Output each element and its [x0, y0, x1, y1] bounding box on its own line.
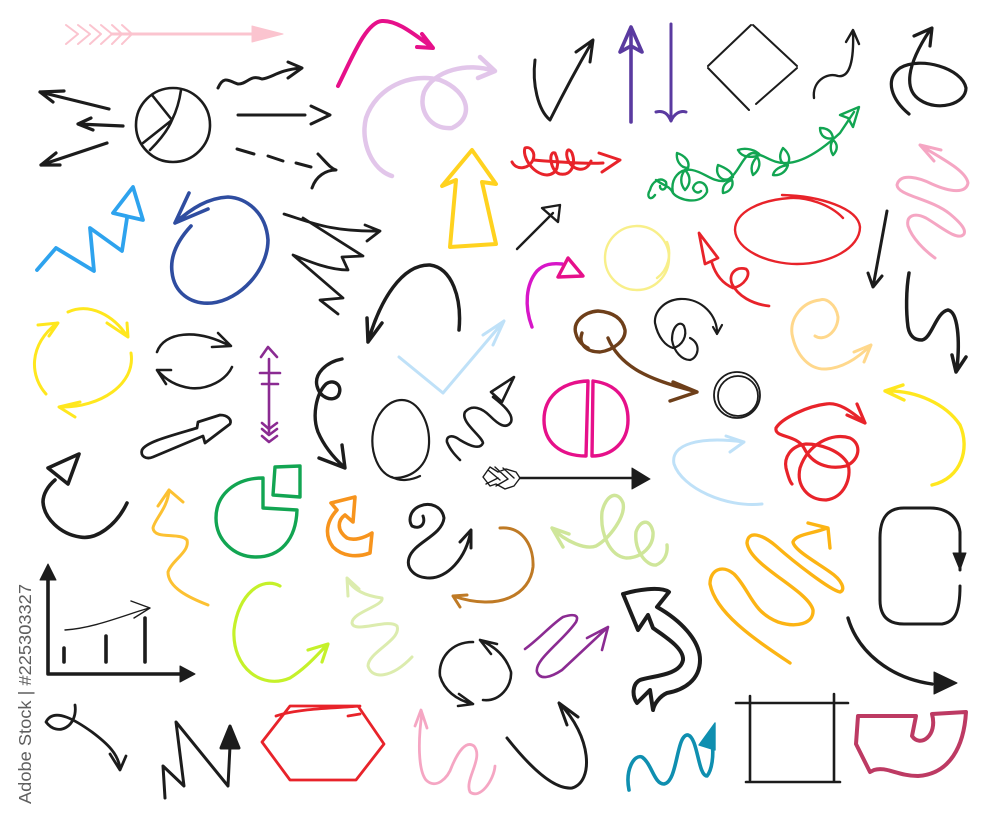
arrow: yellow up	[442, 150, 496, 247]
ellipse: red scribble	[735, 195, 860, 264]
arrow: purple down	[656, 24, 686, 121]
arrow: black small loop	[46, 705, 126, 770]
arrow: black curl	[315, 359, 345, 468]
arrow: orange coil	[710, 523, 843, 663]
arrows: left fan	[40, 91, 123, 165]
arrow: pale green loops	[552, 495, 667, 565]
arrow: red loops	[512, 148, 620, 175]
arrow: teal wave	[628, 735, 713, 790]
arrow: straight right	[238, 106, 330, 124]
cycle: small black arrows	[440, 640, 511, 706]
arrow: loop top right	[891, 28, 966, 114]
cycle: two black arrows	[157, 333, 232, 388]
arrow: purple vertical	[260, 347, 280, 442]
chart: axes with bars	[40, 564, 195, 682]
arrow: crimson block	[856, 712, 966, 776]
frame: black square	[736, 694, 848, 782]
arrow: orange block curl	[327, 497, 372, 556]
arrow: magenta curve	[338, 21, 433, 86]
arrow: black S curl	[408, 504, 471, 578]
arrow: black check	[534, 40, 593, 120]
arrow: black feathered	[483, 467, 650, 489]
arrow: brown loop	[575, 311, 697, 401]
arrow: dashed right	[237, 149, 336, 188]
arrow: lime curve	[234, 583, 328, 681]
arrowhead: black solid	[934, 672, 957, 694]
arrow: black spiky	[284, 214, 380, 314]
arrow: pink wave	[897, 145, 968, 258]
arrow: red small curl	[699, 233, 769, 306]
arrow: black lightning	[163, 722, 239, 798]
arrow: navy circle	[172, 193, 268, 303]
arrow: magenta hook	[527, 258, 583, 327]
arrow: pink wave lower	[415, 710, 495, 794]
arrow: black long curve	[848, 618, 932, 684]
arrow: black U	[507, 703, 587, 788]
pie chart: green	[216, 466, 300, 557]
circle: black scribble	[714, 372, 760, 418]
hexagon: red	[262, 706, 384, 780]
arrow: yellow curve	[885, 385, 964, 485]
arrow: black thin down	[868, 211, 887, 287]
arrow: black wave outline	[447, 377, 514, 460]
arrow: light blue loop	[674, 436, 762, 505]
arrow: pale green wave	[347, 578, 412, 675]
ellipse: black egg	[372, 400, 429, 480]
arrow: pink feathered	[66, 25, 283, 44]
arrow: lilac spiral	[364, 57, 495, 176]
pie chart: black circle	[136, 88, 210, 162]
circle: pale yellow	[605, 226, 669, 290]
arrow: squiggle thin	[814, 30, 859, 98]
arrow: pale orange spiral	[792, 300, 871, 369]
arrow: black hook large	[367, 265, 460, 342]
arrow: red knot	[776, 404, 865, 500]
arrow: small diagonal	[517, 205, 560, 249]
arrow: orange wave	[153, 490, 208, 605]
arrow: black corner thick	[43, 454, 127, 537]
arrowhead: teal	[699, 723, 715, 750]
arrow: green vine	[648, 107, 859, 200]
arrow: outlined black diagonal	[142, 415, 231, 458]
arrow: black S	[907, 273, 966, 372]
arrow: thick black outlined	[623, 589, 700, 710]
arrow: brown curve	[453, 528, 533, 607]
arrow: blue zigzag	[37, 187, 143, 271]
frame: black rounded arrow	[880, 508, 966, 624]
diamond: black	[708, 25, 797, 110]
arrow: black scribble	[655, 299, 722, 360]
shape: magenta split circle	[544, 381, 628, 456]
arrow: purple zigzag	[525, 615, 608, 677]
stock watermark text: Adobe Stock | #225303327	[15, 584, 35, 804]
arrow: purple up	[620, 27, 642, 122]
arrow: light blue check	[399, 321, 504, 393]
arrow: wavy top	[218, 62, 302, 88]
cycle: yellow arrows	[34, 309, 131, 417]
